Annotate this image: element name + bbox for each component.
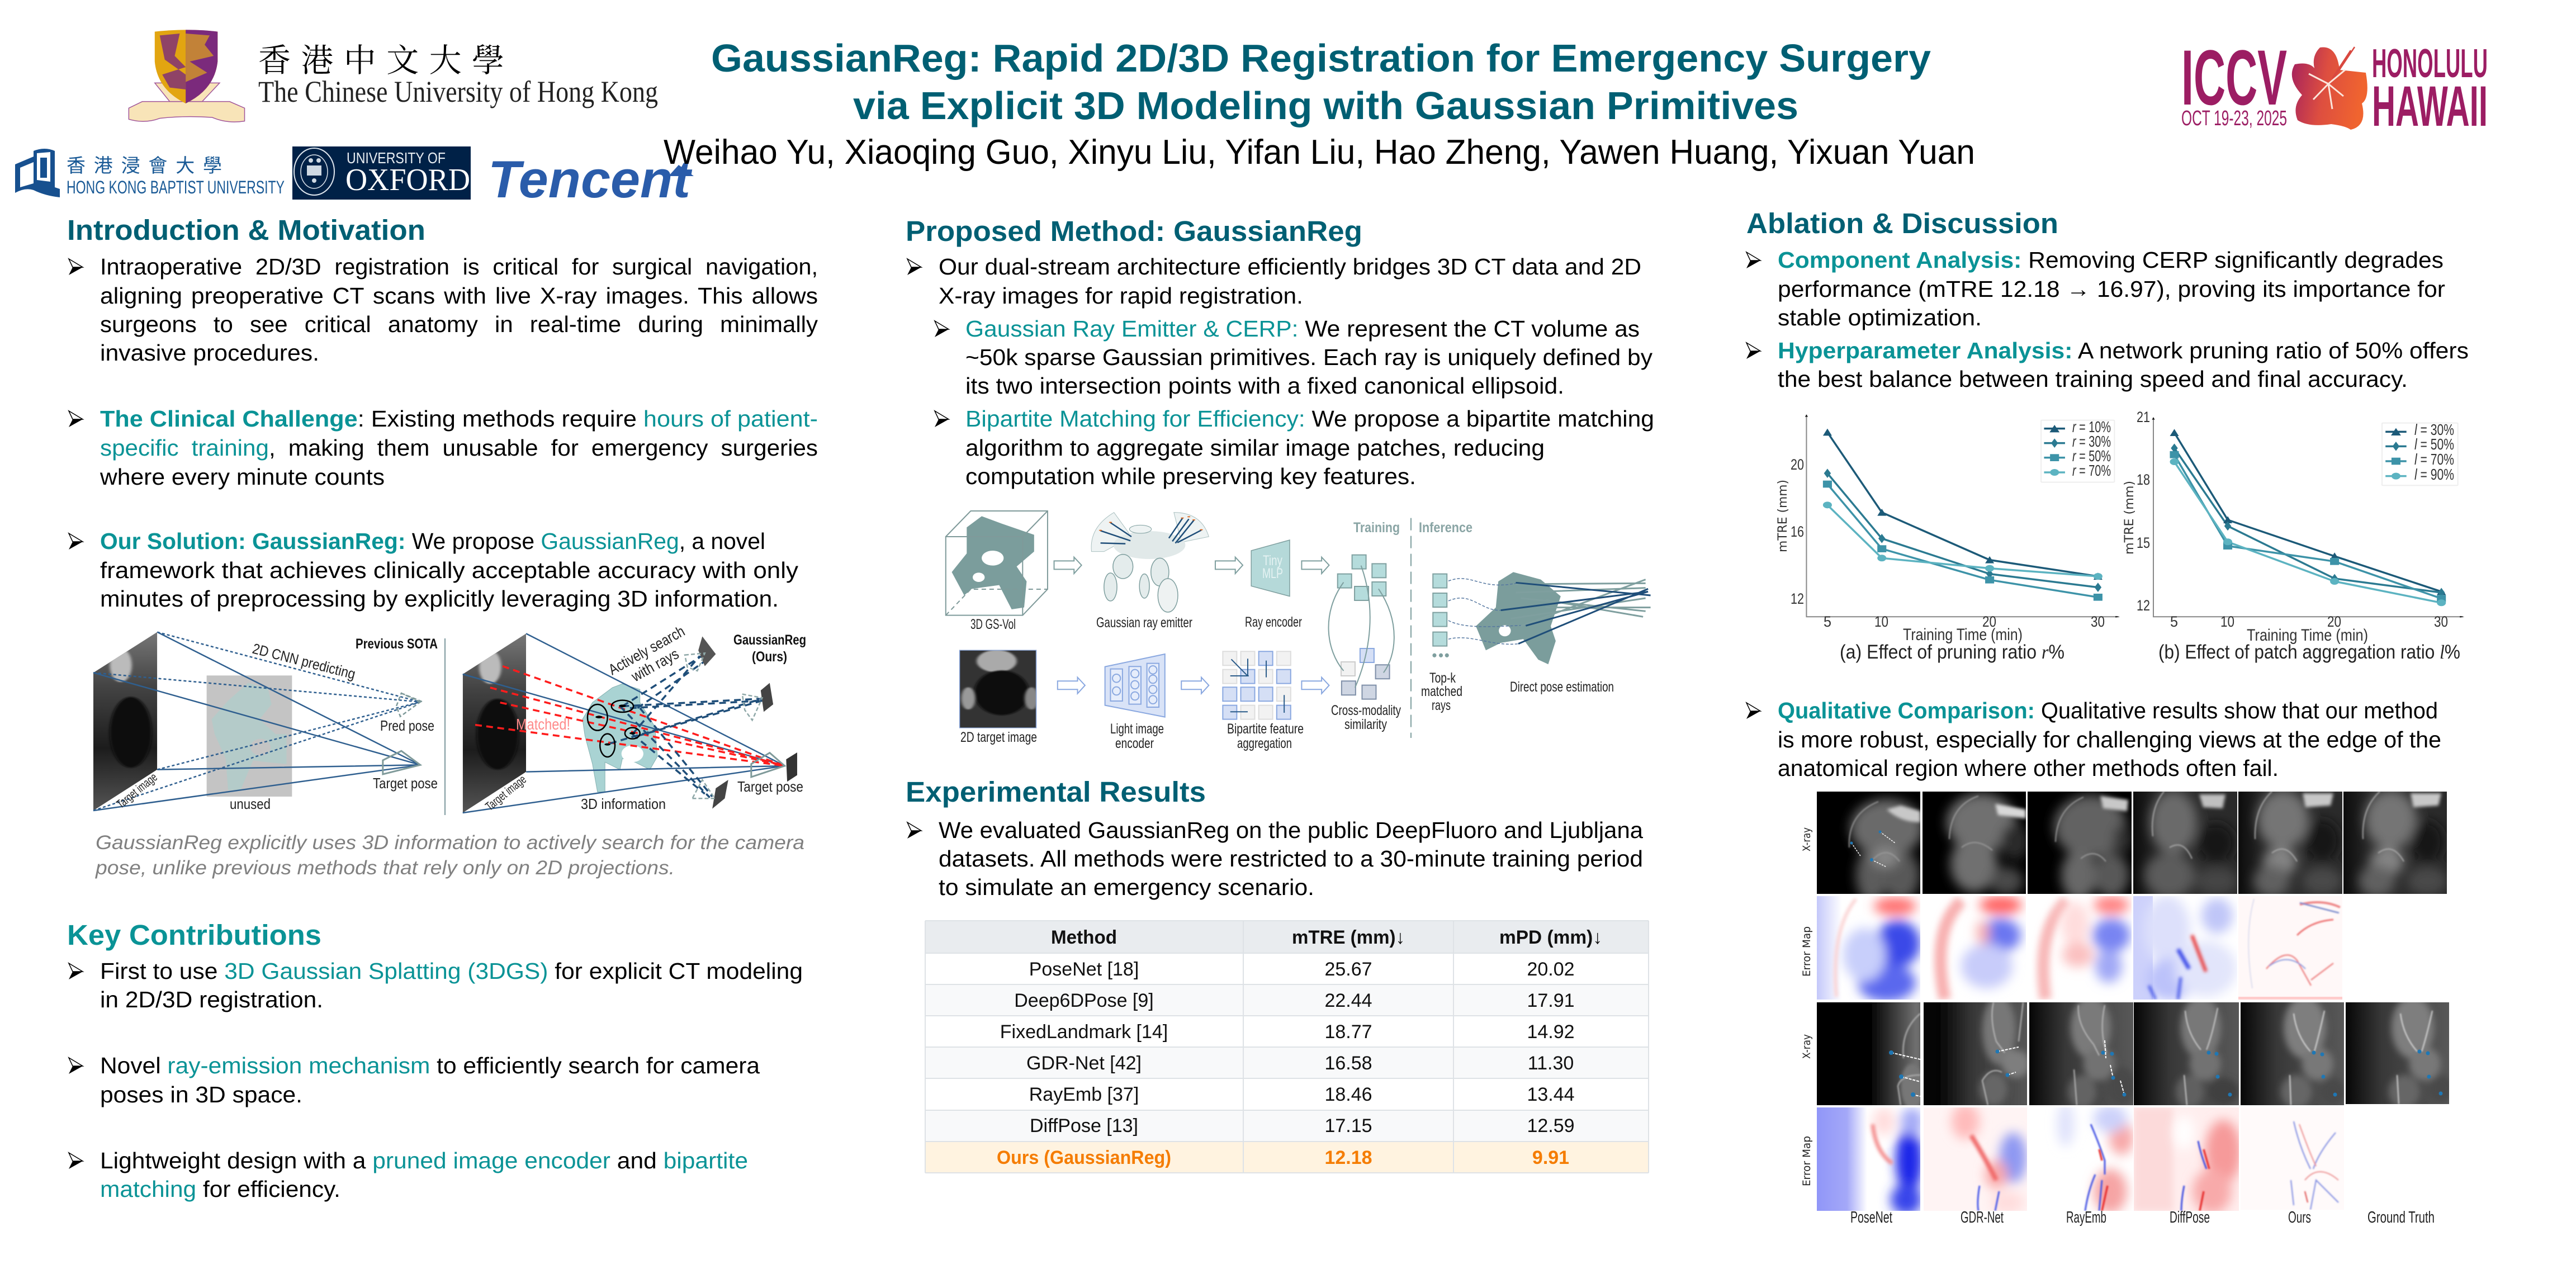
authors: Weihao Yu, Xiaoqing Guo, Xinyu Liu, Yifan Liu, Hao Zheng, Yawen Huang, Yixuan Yuan — [664, 133, 1975, 172]
text block: Gaussian ray emitter: its two intersection points with a fixed canonical ellipsoid. — [965, 373, 1564, 399]
labels: pipeline captions: Inference — [1419, 520, 1472, 536]
text block: clinical challenge: specific training, making them unusable for emergency surgeries — [100, 435, 818, 461]
logo: ICCV 2025 Honolulu — [2181, 34, 2488, 138]
text block: contribution 2: Novel ray-emission mechanism to efficiently search for camera — [100, 1053, 760, 1078]
labels: pipeline captions: Gaussian ray emitter — [1096, 615, 1192, 631]
tile: GDR-Net x-ray row 3 — [1924, 996, 2033, 1111]
logo text: University of: UNIVERSITY OF — [347, 149, 446, 167]
icon: Gaussian ray emitter — [1091, 513, 1209, 612]
text block: evaluation setup: datasets. All methods were restricted to a 30-minute training period — [939, 846, 1643, 872]
legend labels: r values: r = 50% — [2072, 447, 2111, 465]
diagram: GaussianReg geometry — [463, 633, 797, 813]
table: results — [925, 921, 1649, 1173]
table: results: Method — [1051, 927, 1117, 948]
labels: pipeline captions: Bipartite feature — [1227, 721, 1304, 737]
icon: top-k matched rays — [1433, 574, 1447, 646]
tile: RayEmb error row 2 — [2028, 896, 2132, 1000]
text block: contribution 3 — [69, 1148, 748, 1202]
text block: our solution — [69, 528, 799, 612]
text block: evaluation setup: We evaluated GaussianReg on the public DeepFluoro and Ljubljana — [939, 817, 1643, 843]
table: results: 17.91 — [1527, 990, 1575, 1011]
text block: bipartite matching: computation while preserving key features. — [965, 463, 1416, 489]
column labels: Ground Truth — [2367, 1209, 2435, 1227]
text block: contribution 1: in 2D/3D registration. — [100, 987, 323, 1012]
figure: pipeline diagram — [946, 511, 1651, 751]
icon: HKBU book — [15, 149, 60, 197]
figure: previous SOTA vs GaussianReg diagram — [93, 623, 806, 815]
labels: pipeline captions — [960, 520, 1614, 751]
tile: Ours error row 2 — [2238, 896, 2342, 1000]
text block: qualitative comparison: anatomical region where other methods often fail. — [1778, 755, 2279, 781]
column labels: RayEmb — [2066, 1209, 2106, 1227]
diagram: pipeline shapes — [946, 511, 1651, 738]
text block: clinical challenge: The Clinical Challenge : Existing methods require hours of patient- — [100, 406, 818, 432]
row 3: X-ray — [1817, 996, 2453, 1111]
text block: bipartite matching — [935, 406, 1654, 489]
axis labels: chart b — [2123, 409, 2448, 645]
logo text: ICCV: ICCV — [2181, 34, 2287, 121]
labels: pipeline captions: Ray encoder — [1245, 614, 1302, 630]
axis labels: chart a: 10 — [1874, 613, 1888, 630]
text block: clinical challenge — [69, 406, 818, 490]
table: results: 25.67 — [1324, 959, 1372, 980]
legend box — [2382, 423, 2458, 485]
text block: contribution 1: First to use 3D Gaussian Splatting (3DGS) for explicit CT modeling — [100, 958, 803, 984]
tile: GDR-Net x-ray row 1 — [1922, 792, 2026, 894]
table: results: PoseNet [18] — [1029, 959, 1139, 980]
icon: tiny MLP encoder — [1251, 540, 1290, 596]
text block: hyperparameter analysis — [1746, 338, 2469, 392]
logo text: CUHK Chinese: 香港中文大學 — [258, 34, 504, 81]
table: results: 11.30 — [1528, 1053, 1574, 1074]
axis labels: chart b: 5 — [2170, 613, 2178, 630]
text block: registration intro: invasive procedures. — [100, 340, 319, 366]
label: unused: unused — [230, 795, 271, 812]
text block: contribution 3: Lightweight design with a pruned image encoder and bipartite — [100, 1148, 748, 1173]
heading: ablation: Ablation & Discussion — [1746, 207, 2058, 239]
chart caption b: (b) Effect of patch aggregation ratio l% — [2158, 641, 2460, 663]
axis labels: chart b: 30 — [2434, 613, 2448, 630]
text block: registration intro — [69, 254, 818, 366]
label: Target pose: Target pose — [373, 775, 438, 792]
text block: dual-stream architecture: X-ray images for rapid registration. — [939, 283, 1303, 309]
text block: registration intro: surgeons to see critical anatomy in real-time during minimally — [100, 311, 818, 337]
text block: Gaussian ray emitter — [935, 316, 1653, 399]
chart: effect of patch aggregation ratio — [2123, 409, 2464, 663]
arrows: cross-modality matching — [1329, 566, 1394, 688]
logo text: Hawaii: HAWAII — [2372, 74, 2488, 138]
axis labels: chart b: 21 — [2137, 409, 2150, 425]
tile: PoseNet error row 4 — [1817, 1107, 1923, 1215]
row labels — [1801, 827, 1813, 1186]
logo: Tencent: Tencent — [488, 150, 693, 209]
table: results: FixedLandmark [14] — [1000, 1021, 1168, 1043]
heading: key contributions: Key Contributions — [67, 919, 321, 951]
table: results: 12.59 — [1527, 1115, 1575, 1137]
logo: University of Oxford — [292, 146, 471, 200]
label: Ours: (Ours) — [752, 649, 787, 665]
icon: ray feature tokens — [1338, 555, 1386, 600]
labels: pipeline captions: Cross-modality — [1331, 703, 1401, 718]
text block: contribution 1 — [69, 958, 803, 1012]
label: Pred pose: Pred pose — [380, 717, 434, 734]
heading: proposed method: Proposed Method: GaussianReg — [906, 215, 1362, 247]
logo text: CUHK English: The Chinese University of Hong Kong — [258, 75, 658, 108]
table: results: 14.92 — [1527, 1021, 1575, 1043]
table: results: 13.44 — [1527, 1084, 1575, 1105]
labels: pipeline captions: Top-k — [1429, 670, 1456, 686]
table: results: DiffPose [13] — [1030, 1115, 1138, 1137]
tile: GDR-Net error row 4 — [1924, 1104, 2027, 1214]
column labels: GDR-Net — [1961, 1209, 2004, 1227]
row 1: X-ray — [1817, 790, 2447, 903]
text block: clinical challenge: where every minute counts — [100, 464, 385, 490]
axis labels: chart b: 15 — [2137, 534, 2150, 551]
column labels — [1850, 1209, 2435, 1227]
label: Target image left: Target image — [113, 770, 160, 811]
text block: registration intro: aligning preoperative CT scans with live X-ray images. This allows — [100, 283, 818, 309]
tile: Ours error row 4 — [2241, 1107, 2344, 1210]
label: Target image right: Target image — [482, 772, 529, 813]
tile: GDR-Net error row 2 — [1922, 896, 2026, 1000]
column labels: DiffPose — [2170, 1209, 2210, 1227]
label: Matched: Matched! — [516, 716, 570, 733]
text block: component analysis — [1746, 247, 2445, 330]
axis labels: chart b: 12 — [2137, 597, 2150, 614]
tile: Ground Truth x-ray row 3 — [2346, 996, 2453, 1109]
text block: qualitative comparison — [1746, 698, 2441, 781]
axis labels: chart b: Training Time (min) — [2247, 626, 2368, 645]
labels: pipeline captions: encoder — [1115, 736, 1154, 751]
axis labels: chart b: 10 — [2220, 613, 2234, 630]
axis labels: chart b: 20 — [2327, 613, 2341, 630]
chart caption a: (a) Effect of pruning ratio r% — [1840, 641, 2064, 663]
text block: bipartite matching: algorithm to aggregate similar image patches, reducing — [965, 435, 1545, 461]
axis labels: chart a: 20 — [1982, 613, 1996, 630]
tile: DiffPose error row 2 — [2133, 895, 2237, 1001]
title: GaussianReg: Rapid 2D/3D Registration for Emergency Surgery — [711, 36, 1931, 80]
tile: DiffPose x-ray row 1 — [2133, 792, 2237, 894]
panel: proposed method — [906, 215, 1654, 489]
figure caption: pose, unlike previous methods that rely only on 2D projections. — [95, 857, 675, 879]
row 4: error map — [1817, 1102, 2344, 1215]
legend labels: l values: l = 70% — [2414, 451, 2454, 468]
icon: hibiscus flower — [2292, 47, 2367, 130]
label: Previous SOTA: Previous SOTA — [356, 636, 438, 652]
legend labels: r values: r = 30% — [2072, 433, 2111, 450]
legend labels: l values — [2414, 421, 2454, 483]
panel: introduction and motivation — [67, 214, 818, 612]
divider — [444, 638, 446, 815]
heading: experimental results: Experimental Results — [906, 776, 1206, 808]
icon: 3D GS volume — [946, 511, 1048, 615]
table: results: mTRE (mm)↓ — [1292, 927, 1405, 948]
figure caption: GaussianReg explicitly uses 3D information to actively search for the camera — [96, 832, 804, 854]
logo: CUHK — [129, 30, 658, 122]
table: results: RayEmb [37] — [1029, 1084, 1139, 1105]
icon: bipartite feature grid — [1223, 651, 1291, 719]
text block: hyperparameter analysis: Hyperparameter Analysis: A network pruning ratio of 50% offers — [1778, 338, 2469, 363]
text block: qualitative comparison: is more robust, especially for challenging views at the edge of the — [1778, 727, 2441, 752]
column labels: PoseNet — [1850, 1209, 1892, 1227]
table: results: mPD (mm)↓ — [1499, 927, 1602, 948]
figure: qualitative comparison grid — [1801, 790, 2453, 1227]
tile: Ground Truth x-ray row 1 — [2343, 790, 2447, 897]
tile: DiffPose x-ray row 3 — [2134, 996, 2239, 1109]
icon: direct pose estimation — [1448, 572, 1651, 664]
tile: PoseNet x-ray row 3 — [1817, 997, 1923, 1111]
table: results: 12.18 — [1324, 1147, 1372, 1168]
heading: introduction: Introduction & Motivation — [67, 214, 425, 246]
chart: effect of pruning ratio — [1776, 415, 2120, 663]
label: 2D CNN predicting: 2D CNN predicting — [251, 640, 357, 683]
text block: hyperparameter analysis: the best balance between training speed and final accuracy. — [1778, 366, 2408, 392]
axis labels: chart a: 16 — [1791, 523, 1804, 540]
text block: component analysis: Component Analysis: Removing CERP significantly degrades — [1778, 247, 2444, 273]
axis labels: chart b: mTRE (mm) — [2123, 481, 2137, 555]
legend labels: r values: r = 70% — [2072, 462, 2111, 479]
axis labels: chart a: 20 — [1791, 456, 1804, 473]
text block: dual-stream architecture — [907, 254, 1641, 309]
tile: RayEmb x-ray row 1 — [2028, 792, 2132, 894]
tile: Ours x-ray row 1 — [2238, 790, 2342, 897]
text block: our solution: framework that achieves clinically acceptable accuracy with only — [100, 557, 799, 583]
table: results: 9.91 — [1532, 1147, 1569, 1168]
row labels: Error Map — [1801, 926, 1813, 977]
icon: 2D target x-ray — [959, 650, 1036, 728]
logo text: HKBU English: HONG KONG BAPTIST UNIVERSITY — [67, 177, 285, 197]
legend labels: r values — [2072, 418, 2111, 479]
label: with rays: with rays — [628, 645, 681, 685]
row labels: Error Map — [1801, 1136, 1813, 1186]
logo text: HKBU Chinese: 香港浸會大學 — [67, 150, 222, 178]
text block: Gaussian ray emitter: Gaussian Ray Emitter & CERP: We represent the CT volume as — [965, 316, 1640, 342]
text block: component analysis: stable optimization. — [1778, 305, 1982, 330]
text block: bipartite matching: Bipartite Matching for Efficiency: We propose a bipartite matching — [965, 406, 1654, 432]
axis labels: chart a: 12 — [1791, 590, 1804, 607]
table: results: Deep6DPose [9] — [1014, 990, 1154, 1011]
tile: RayEmb error row 4 — [2029, 1102, 2134, 1214]
labels: pipeline captions: Light image — [1110, 721, 1164, 737]
figure caption — [95, 832, 804, 879]
axis labels: chart a: 5 — [1824, 613, 1831, 630]
icon: image feature tokens — [1341, 648, 1390, 699]
labels: pipeline captions: 3D GS-Vol — [970, 617, 1016, 632]
label: Target pose right: Target pose — [737, 778, 803, 795]
table: results: Ours (GaussianReg) — [997, 1147, 1171, 1168]
tile: RayEmb x-ray row 3 — [2029, 996, 2135, 1109]
logo text: Oxford: OXFORD — [345, 163, 470, 197]
axis labels: chart a — [1776, 456, 2105, 644]
icon: light image encoder — [1105, 654, 1165, 717]
axis labels: chart b: 18 — [2137, 471, 2150, 488]
title: via Explicit 3D Modeling with Gaussian Primitives — [853, 84, 1798, 127]
text block: registration intro: Intraoperative 2D/3D registration is critical for surgical navigation, — [100, 254, 818, 280]
table: results: GDR-Net [42] — [1026, 1053, 1142, 1074]
labels: pipeline captions: 2D target image — [960, 730, 1037, 745]
icon: CUHK crest — [129, 30, 245, 122]
panel: ablation and discussion — [1746, 207, 2469, 392]
text block: evaluation setup — [907, 817, 1643, 900]
row labels: X-ray — [1801, 1034, 1813, 1059]
text block: component analysis: performance (mTRE 12.18 → 16.97), proving its importance for — [1778, 276, 2445, 302]
text block: contribution 2 — [69, 1053, 760, 1107]
text block: our solution: minutes of preprocessing by explicitly leveraging 3D information. — [100, 586, 779, 612]
labels: pipeline captions: MLP — [1262, 566, 1283, 581]
text block: our solution: Our Solution: GaussianReg: We propose GaussianReg, a novel — [100, 528, 765, 554]
label: 3D information: 3D information — [581, 795, 666, 812]
axis labels: chart a: 30 — [2091, 613, 2105, 630]
text block: evaluation setup: to simulate an emergency scenario. — [939, 874, 1314, 900]
table: results: 20.02 — [1527, 959, 1575, 980]
labels: pipeline captions: Direct pose estimation — [1510, 679, 1614, 695]
table: results: 17.15 — [1324, 1115, 1372, 1137]
text block: contribution 3: matching for efficiency. — [100, 1176, 340, 1202]
row labels: X-ray — [1801, 827, 1813, 851]
text block: dual-stream architecture: Our dual-stream architecture efficiently bridges 3D CT data and 2D — [939, 254, 1641, 280]
table: results: 22.44 — [1324, 990, 1372, 1011]
axis labels: chart a: mTRE (mm) — [1776, 480, 1790, 552]
legend labels: l values: l = 50% — [2414, 435, 2454, 453]
table: results: 18.77 — [1324, 1021, 1372, 1043]
label: Actively search: Actively search — [605, 623, 688, 678]
tile: Ours x-ray row 3 — [2241, 996, 2345, 1109]
labels: pipeline captions: Tiny — [1263, 553, 1282, 569]
labels: pipeline captions: Training — [1353, 520, 1400, 536]
column labels: Ours — [2288, 1209, 2311, 1227]
table: results: 18.46 — [1324, 1084, 1372, 1105]
text block: Gaussian ray emitter: ~50k sparse Gaussian primitives. Each ray is uniquely defined by — [965, 344, 1653, 370]
axis labels: chart a: Training Time (min) — [1903, 626, 2023, 644]
labels: pipeline captions: matched — [1421, 684, 1462, 699]
legend labels: l values: l = 30% — [2414, 421, 2454, 438]
labels: pipeline captions: similarity — [1344, 717, 1387, 732]
logo text: dates: OCT 19-23, 2025 — [2181, 107, 2287, 130]
legend labels: l values: l = 90% — [2414, 466, 2454, 483]
tile: DiffPose error row 4 — [2134, 1107, 2241, 1214]
row 2: error map — [1817, 895, 2342, 1002]
tile: PoseNet x-ray row 1 — [1817, 792, 1920, 894]
title — [711, 36, 1931, 127]
legend box — [2041, 420, 2114, 482]
panel: key contributions — [67, 919, 803, 1202]
label: GaussianReg: GaussianReg — [733, 632, 806, 648]
labels: pipeline captions: aggregation — [1237, 736, 1292, 751]
legend labels: r values: r = 10% — [2072, 418, 2111, 435]
text block: qualitative comparison: Qualitative Comparison: Qualitative results show that our method — [1778, 698, 2438, 723]
text block: contribution 2: poses in 3D space. — [100, 1082, 302, 1107]
panel: experimental results — [906, 776, 1649, 1173]
labels: pipeline captions: rays — [1432, 698, 1451, 713]
logo: Hong Kong Baptist University — [15, 149, 285, 197]
icon: Oxford seal — [294, 148, 334, 195]
diagram: previous SOTA geometry — [93, 632, 423, 811]
tile: PoseNet error row 2 — [1817, 896, 1920, 1002]
table: results: 16.58 — [1324, 1053, 1372, 1074]
